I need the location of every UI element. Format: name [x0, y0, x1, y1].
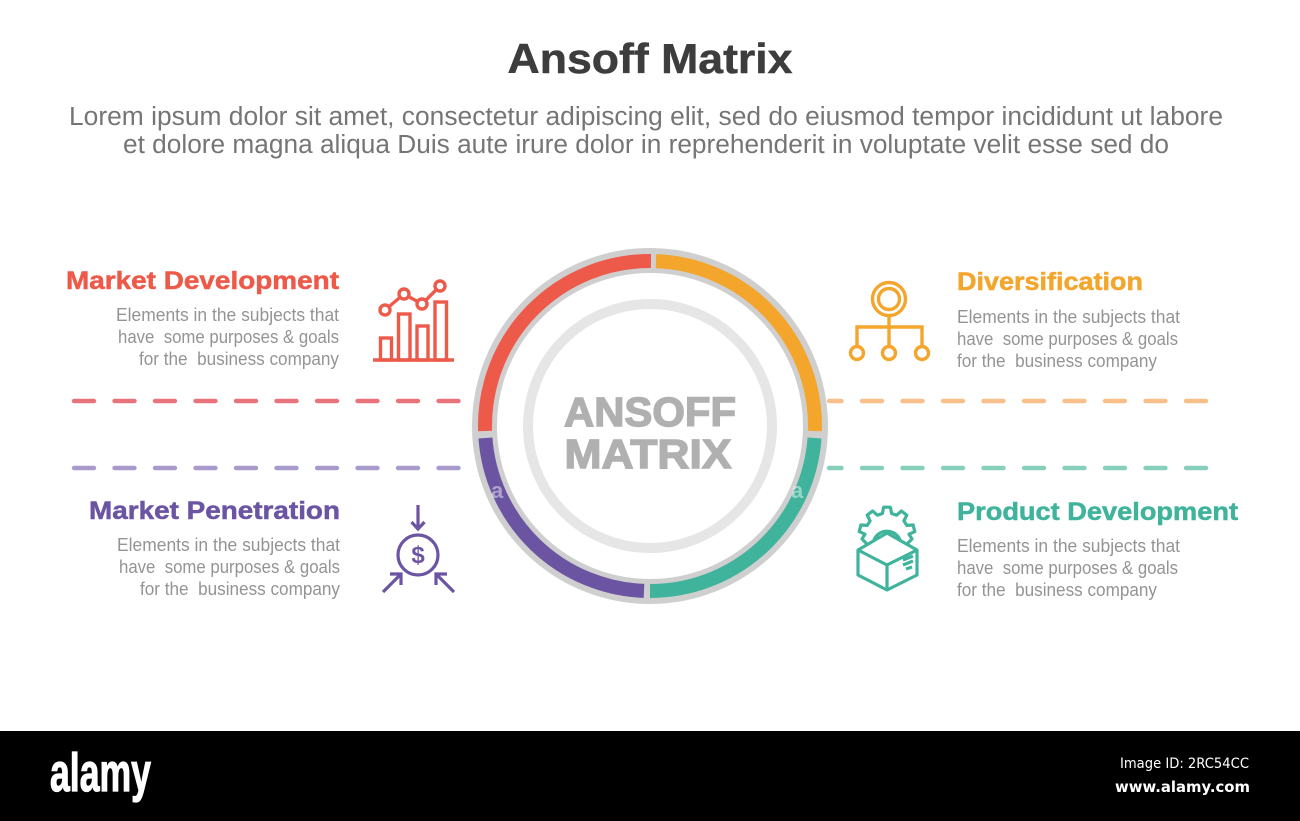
- block: product development: have some purposes & goals: [957, 558, 1178, 578]
- block: diversification: Elements in the subjects that: [957, 307, 1180, 327]
- block: product development: Product Development: [957, 498, 1239, 526]
- center label: [564, 389, 736, 477]
- watermark fragments on the ring: [491, 478, 804, 503]
- segment: market penetration: [485, 438, 644, 591]
- dashed connector: market penetration: [74, 466, 462, 470]
- dashed connector: diversification: [829, 399, 1206, 403]
- icon: bar chart with trend line: [373, 281, 454, 360]
- block: market development: Market Development: [66, 267, 340, 295]
- segment: diversification: [656, 261, 815, 431]
- inner light ring: [528, 304, 772, 548]
- watermark fragments on the ring: a: [491, 478, 504, 503]
- dashed connector: market development: [74, 399, 462, 403]
- footer url: www.alamy.com: [1115, 778, 1250, 796]
- segment: product development: [650, 438, 815, 591]
- block: product development: for the business company: [957, 580, 1157, 600]
- subtitle text: Lorem ipsum dolor sit amet, consectetur adipiscing elit, sed do eiusmod tempor incididunt ut labore: [69, 103, 1223, 131]
- block: market development: Elements in the subjects that: [116, 305, 339, 325]
- outer gray ring: [484, 260, 816, 592]
- block: diversification: Diversification: [957, 268, 1143, 296]
- block: market development: have some purposes & goals: [118, 327, 339, 347]
- block: market penetration: [89, 497, 340, 599]
- central ring diagram: [484, 260, 816, 592]
- center label: ANSOFF: [564, 389, 736, 435]
- center label: MATRIX: [564, 431, 732, 477]
- block: market development: [66, 267, 340, 369]
- block: market penetration: have some purposes & goals: [119, 557, 340, 577]
- segment: market development: [485, 261, 651, 431]
- footer bar: [0, 731, 1300, 821]
- subtitle text: et dolore magna aliqua Duis aute irure dolor in reprehenderit in voluptate velit esse sed do: [123, 131, 1169, 159]
- footer image id: Image ID: 2RC54CC: [1120, 756, 1249, 772]
- icon: hierarchy network: [850, 282, 928, 360]
- footer logo: alamy: [50, 743, 151, 803]
- block: market penetration: for the business company: [140, 579, 340, 599]
- icon: box with gear: [858, 507, 917, 590]
- title: Ansoff Matrix: [508, 35, 793, 82]
- watermark fragments on the ring: a: [791, 478, 804, 503]
- icon: dollar with three arrows: $: [411, 542, 425, 569]
- block: market penetration: Elements in the subjects that: [117, 535, 340, 555]
- block: diversification: [957, 268, 1180, 371]
- icon: dollar with three arrows: [383, 505, 454, 592]
- block: product development: [957, 498, 1239, 600]
- block: product development: Elements in the subjects that: [957, 536, 1180, 556]
- block: market development: for the business company: [139, 349, 339, 369]
- block: diversification: have some purposes & goals: [957, 329, 1178, 349]
- block: market penetration: Market Penetration: [89, 497, 340, 525]
- block: diversification: for the business company: [957, 351, 1157, 371]
- subtitle text: [69, 103, 1223, 159]
- dashed connector: product development: [829, 466, 1206, 470]
